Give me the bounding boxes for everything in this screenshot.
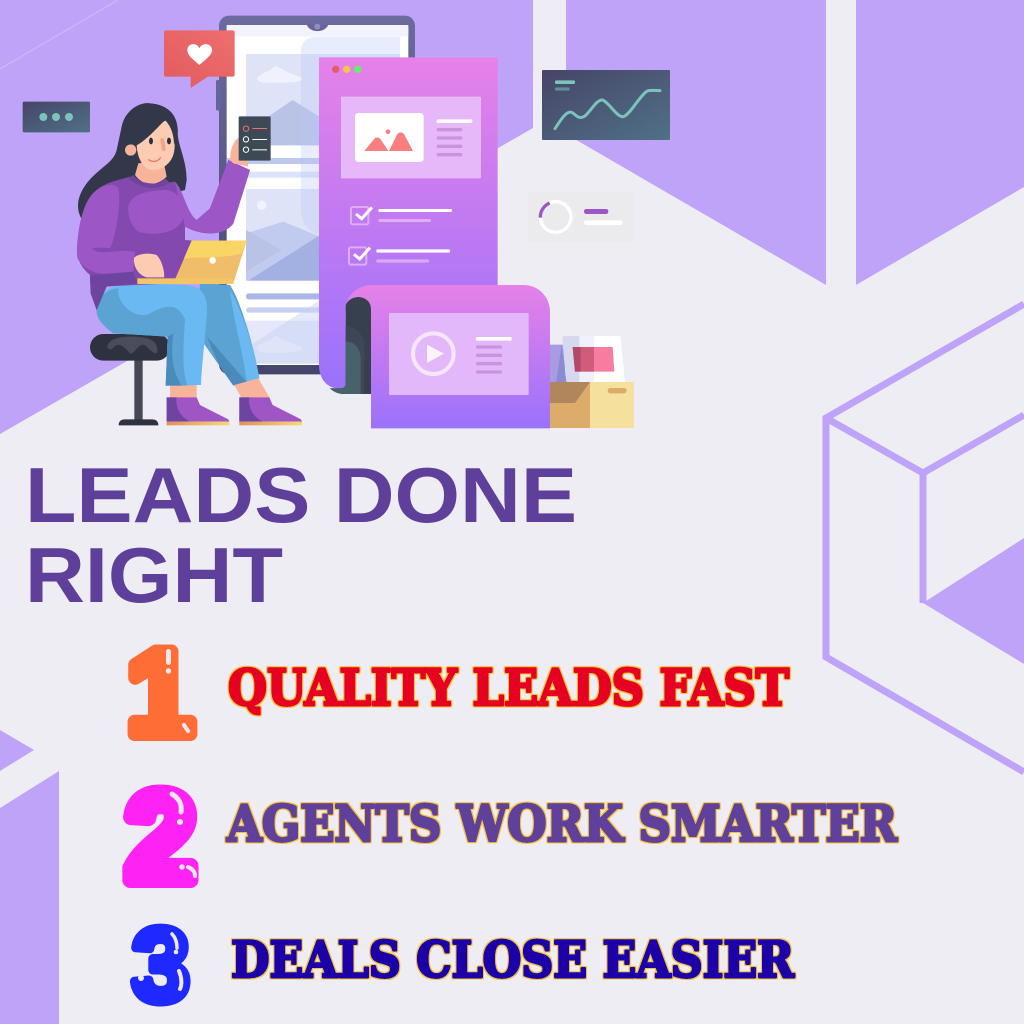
illustration: cardboard box with papers <box>550 336 634 428</box>
number 3: 3 <box>132 908 190 1024</box>
sweater highlights and shading <box>77 160 250 310</box>
chart card: line graph <box>542 70 670 140</box>
ankles <box>170 378 270 398</box>
image card <box>341 97 481 178</box>
stool <box>90 334 170 425</box>
face <box>122 103 178 170</box>
title: LEADS DONE <box>25 451 577 539</box>
donut chart card <box>528 192 634 242</box>
item 2: number and label <box>126 768 897 907</box>
checklist <box>349 207 452 265</box>
raised hand and card <box>230 116 271 167</box>
number 2: 2 <box>126 768 196 907</box>
front sheet with video <box>346 285 550 428</box>
illustration: scrolling web page <box>319 57 550 428</box>
illustration: phone <box>216 16 415 374</box>
label 2: AGENTS WORK SMARTER <box>226 794 897 853</box>
title: RIGHT <box>25 531 283 619</box>
dark scroll underside <box>330 297 371 394</box>
neck <box>135 160 167 184</box>
label 1: QUALITY LEADS FAST <box>228 658 789 717</box>
window dots <box>332 66 361 73</box>
item 1: number and label <box>127 626 789 760</box>
sweater <box>77 160 250 310</box>
hand on laptop <box>134 254 164 277</box>
illustration: woman on stool with laptop <box>77 103 302 425</box>
item 3: number and label <box>132 908 794 1024</box>
hair back <box>78 103 187 222</box>
title <box>25 451 577 619</box>
back leg <box>197 283 259 386</box>
front leg <box>96 283 207 386</box>
label 3: DEALS CLOSE EASIER <box>231 930 794 989</box>
back sheet <box>319 57 498 389</box>
icon: heart speech bubble <box>164 30 235 88</box>
icon: three dots card <box>23 102 90 132</box>
number 1: 1 <box>127 626 194 760</box>
laptop <box>137 241 247 284</box>
shoes <box>167 397 302 425</box>
